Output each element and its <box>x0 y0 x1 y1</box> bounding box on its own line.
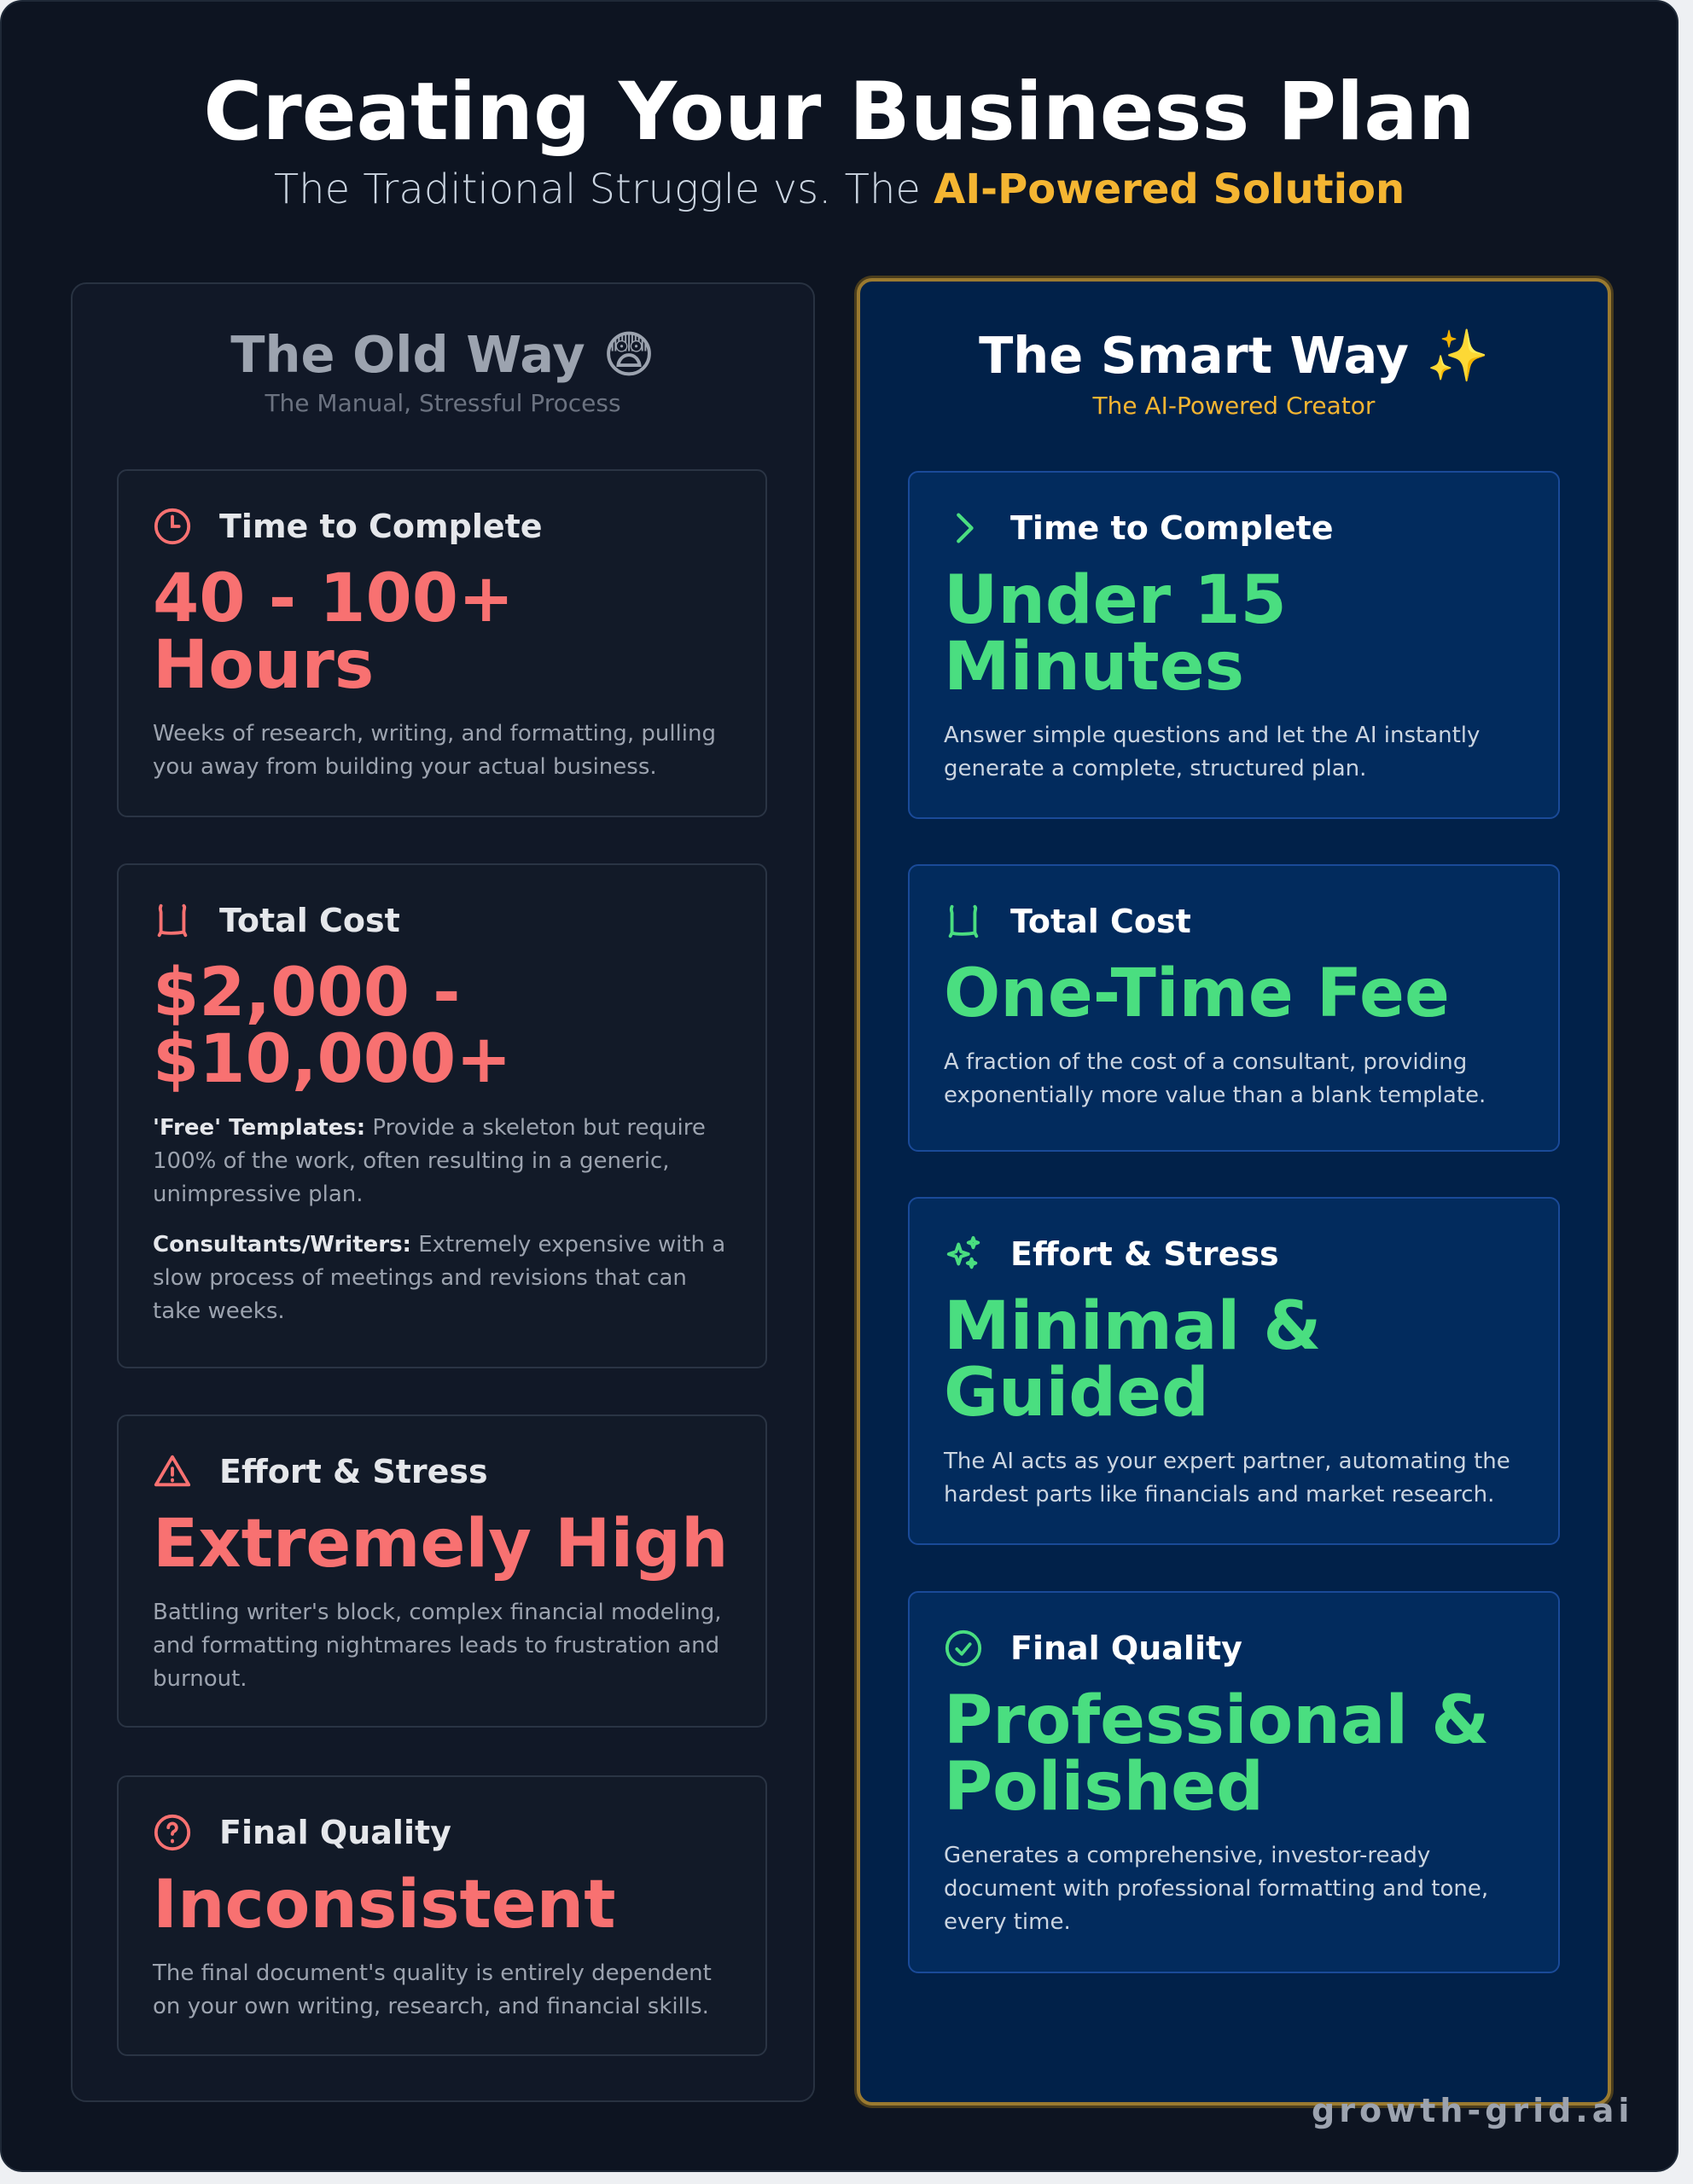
header: quality: Final Quality <box>1010 1629 1242 1667</box>
value: Under 15 <box>944 562 1287 639</box>
header: time: Time to Complete <box>1010 509 1334 547</box>
panel: old way <box>71 282 815 2102</box>
description: Weeks of research, writing, and formatting, pulling you away from building your actual business. <box>153 721 716 780</box>
card: smart quality <box>908 1591 1560 1973</box>
card: smart effort <box>908 1197 1560 1545</box>
header: time: Time to Complete <box>219 508 543 545</box>
card: smart cost <box>908 864 1560 1152</box>
smart way heading: The Smart Way ✨ <box>979 326 1489 385</box>
value: Inconsistent <box>153 1867 616 1943</box>
description: The final document's quality is entirely dependent on your own writing, research, and financial skills. <box>153 1960 712 2019</box>
value <box>153 955 512 1098</box>
description: 'Free' Templates: Provide a skeleton but require 100% of the work, often resulting in a generic, unimpressive plan. <box>153 1115 706 1207</box>
header: effort: Effort & Stress <box>1010 1235 1279 1273</box>
old way subheading: The Manual, Stressful Process <box>265 389 621 417</box>
header: quality: Final Quality <box>219 1814 451 1851</box>
description: Battling writer's block, complex financial modeling, and formatting nightmares leads to frustration and burnout. <box>153 1600 721 1692</box>
value: Hours <box>153 627 374 704</box>
card: old cost <box>117 863 767 1368</box>
description: The AI acts as your expert partner, automating the hardest parts like financials and market research. <box>944 1449 1510 1507</box>
value: Professional & <box>944 1682 1489 1759</box>
value: Minutes <box>944 629 1244 706</box>
value <box>944 1288 1321 1432</box>
description 2: Consultants/Writers: Extremely expensive with a slow process of meetings and revisions that can take weeks. <box>153 1232 725 1324</box>
card: old time <box>117 469 767 817</box>
value: One-Time Fee <box>944 956 1450 1032</box>
description: Answer simple questions and let the AI instantly generate a complete, structured plan. <box>944 723 1480 781</box>
subtitle: The Traditional Struggle vs. The AI-Powered Solution <box>274 166 1405 213</box>
title: Creating Your Business Plan <box>203 66 1475 159</box>
value: Extremely High <box>153 1506 729 1583</box>
header: cost: Total Cost <box>219 902 400 939</box>
value <box>944 1682 1489 1826</box>
card: smart time <box>908 471 1560 819</box>
description: A fraction of the cost of a consultant, providing exponentially more value than a blank template. <box>944 1049 1486 1108</box>
card: old effort <box>117 1414 767 1728</box>
value <box>153 561 514 704</box>
smart way subheading: The AI-Powered Creator <box>1093 392 1375 420</box>
panel: smart way <box>857 278 1611 2106</box>
value: $10,000+ <box>153 1021 512 1098</box>
value: $2,000 - <box>153 955 461 1031</box>
header: cost: Total Cost <box>1010 903 1191 940</box>
old way heading: The Old Way 😨 <box>230 325 655 384</box>
watermark: growth-grid.ai <box>1312 2092 1633 2129</box>
value: 40 - 100+ <box>153 561 514 637</box>
value: Polished <box>944 1749 1264 1826</box>
value <box>944 562 1287 706</box>
description: Generates a comprehensive, investor-ready document with professional formatting and tone, every time. <box>944 1843 1488 1935</box>
value: Guided <box>944 1355 1209 1432</box>
header: effort: Effort & Stress <box>219 1453 488 1490</box>
card: old quality <box>117 1775 767 2056</box>
value: Minimal & <box>944 1288 1321 1365</box>
